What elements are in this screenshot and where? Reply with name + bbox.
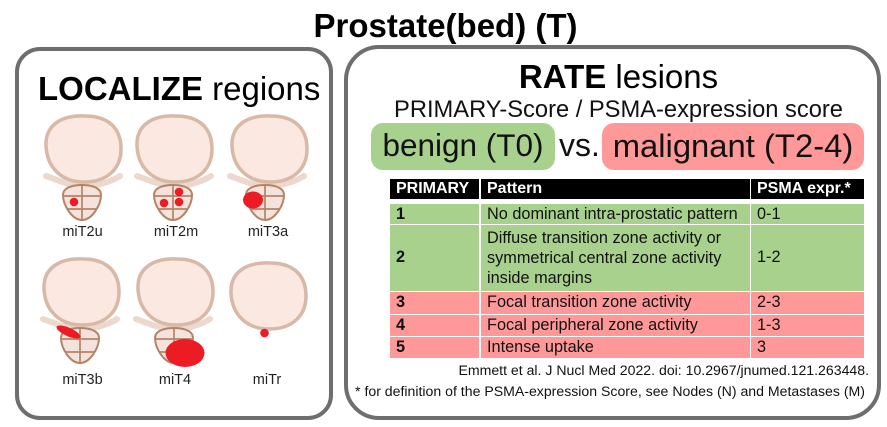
table row 3: [390, 292, 864, 314]
table header: Pattern: [487, 180, 542, 197]
diagram: miT3a: miT3a: [248, 224, 289, 240]
diagram: miTr: miTr: [253, 372, 281, 388]
table row 4: [390, 315, 864, 336]
table row 1: [390, 204, 864, 224]
label: versus: vs.: [559, 127, 600, 163]
table header: PSMA expr.*: [757, 180, 851, 197]
diagram: miT3b: [43, 259, 119, 388]
table header: [390, 179, 864, 199]
panel: localize regions: [15, 47, 333, 420]
table row 3: 3: [396, 293, 405, 311]
citation: Emmett et al. J Nucl Med 2022. doi: 10.2967/jnumed.121.263448.: [458, 362, 869, 378]
table row 4: Focal peripheral zone activity: [487, 316, 698, 334]
table row 3: Focal transition zone activity: [487, 293, 692, 311]
diagram: miT2m: miT2m: [154, 224, 198, 240]
diagram: miT4: [136, 259, 213, 388]
table row 5: 5: [396, 338, 405, 356]
diagram: miTr: [231, 263, 306, 388]
table row 4: 4: [396, 316, 405, 334]
table row 5: Intense uptake: [487, 338, 594, 356]
label: benign: benign (T0): [382, 127, 544, 163]
label: malignant: malignant (T2-4): [613, 127, 853, 164]
diagram: miT3b: miT3b: [62, 372, 103, 388]
diagram: miT4: miT4: [159, 372, 191, 388]
heading: localize regions: LOCALIZE regions: [38, 70, 320, 107]
table row 2: [390, 225, 864, 291]
table row 4: 1-3: [757, 316, 781, 334]
diagram: miT2u: [46, 116, 121, 240]
table row 3: 2-3: [757, 293, 781, 311]
label: benign: [371, 123, 555, 170]
table row 5: [390, 337, 864, 358]
diagram: miT2m: [137, 116, 212, 240]
table row 2: Diffuse transition zone activity or: [487, 229, 721, 247]
diagram: miT3a: [230, 116, 307, 240]
table row 2: inside margins: [487, 269, 592, 287]
table: PRIMARY score: [390, 179, 864, 358]
title: Prostate(bed) (T): [314, 7, 578, 44]
table row 1: 0-1: [757, 205, 781, 223]
footnote: * for definition of the PSMA-expression Score, see Nodes (N) and Metastases (M): [355, 383, 865, 399]
table row 2: 2: [396, 248, 405, 266]
table header: PRIMARY: [396, 180, 469, 197]
panel: rate lesions: [344, 45, 881, 420]
diagram: miT2u: miT2u: [62, 224, 103, 240]
table row 2: symmetrical central zone activity: [487, 249, 721, 267]
subheading: score name: PRIMARY-Score / PSMA-expression score: [394, 97, 843, 123]
heading: rate lesions: RATE lesions: [519, 58, 718, 95]
table row 2: 1-2: [757, 248, 781, 266]
table row 5: 3: [757, 338, 766, 356]
table row 1: No dominant intra-prostatic pattern: [487, 205, 738, 223]
table row 1: 1: [396, 205, 405, 223]
